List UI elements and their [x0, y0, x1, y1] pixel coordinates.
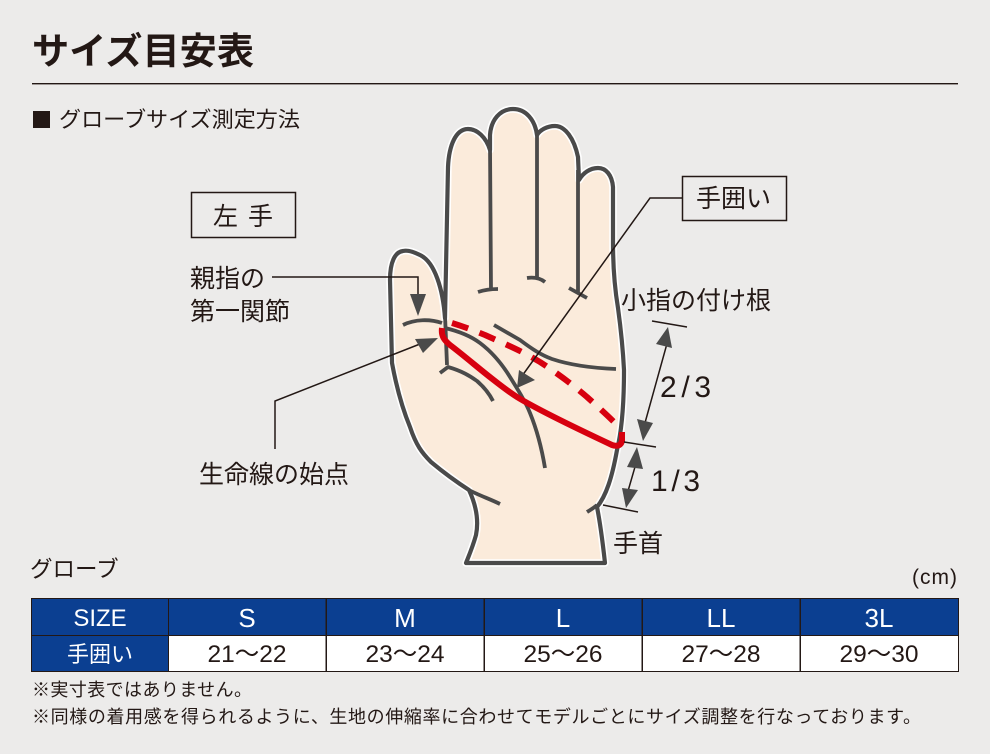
callout arrow: thumb first joint [272, 277, 426, 316]
table header row [73, 603, 893, 633]
label: little finger base: 小指の付け根 [621, 287, 771, 315]
size table [31, 598, 959, 672]
label: left hand [192, 192, 296, 238]
footnotes [32, 680, 921, 727]
label: glove: グローブ [30, 557, 119, 582]
label: thumb first joint: 第一関節 [190, 298, 290, 326]
heading: measuring method: グローブサイズ測定方法 [59, 108, 300, 132]
table value row: 25～26 [523, 641, 603, 668]
table header row: L [556, 603, 570, 633]
callout arrow: hand circumference [517, 198, 682, 388]
hand illustration [390, 109, 624, 563]
table header row: S [238, 603, 256, 633]
label: unit: (cm) [912, 566, 957, 589]
table header row: 3L [865, 603, 893, 633]
dimension ticks and arrows [603, 321, 687, 512]
hand outline [390, 109, 624, 563]
label: start of life line: 生命線の始点 [199, 461, 349, 489]
label: two thirds: 2/3 [660, 371, 711, 404]
table value row: 23～24 [365, 641, 445, 668]
label: wrist: 手首 [613, 530, 663, 558]
table header row: LL [707, 603, 735, 633]
table value row [67, 641, 919, 668]
footnotes: ※同様の着用感を得られるように、生地の伸縮率に合わせてモデルごとにサイズ調整を行なっております。 [32, 707, 921, 727]
label: left hand: 左手 [213, 203, 273, 231]
label: hand circumference: 手囲い [696, 185, 771, 213]
label: hand circumference [682, 176, 786, 220]
table value row: 29～30 [839, 641, 919, 668]
title: サイズ目安表 [32, 31, 254, 72]
table value row: 手囲い [67, 642, 133, 667]
table value row: 21～22 [207, 641, 287, 668]
red solid measurement line [442, 328, 622, 446]
red dashed measurement line [452, 323, 615, 423]
hand white halo [390, 109, 624, 563]
label: thumb first joint: 親指の [190, 265, 265, 293]
callout arrow: start of life line [275, 338, 438, 449]
table header row: SIZE [73, 605, 127, 632]
finger and palm lines [403, 130, 616, 512]
footnotes: ※実寸表ではありません。 [32, 680, 252, 700]
label: one third: 1/3 [651, 465, 700, 498]
table header row: M [394, 603, 416, 633]
table value row: 27～28 [681, 641, 761, 668]
label: thumb first joint [190, 265, 290, 326]
